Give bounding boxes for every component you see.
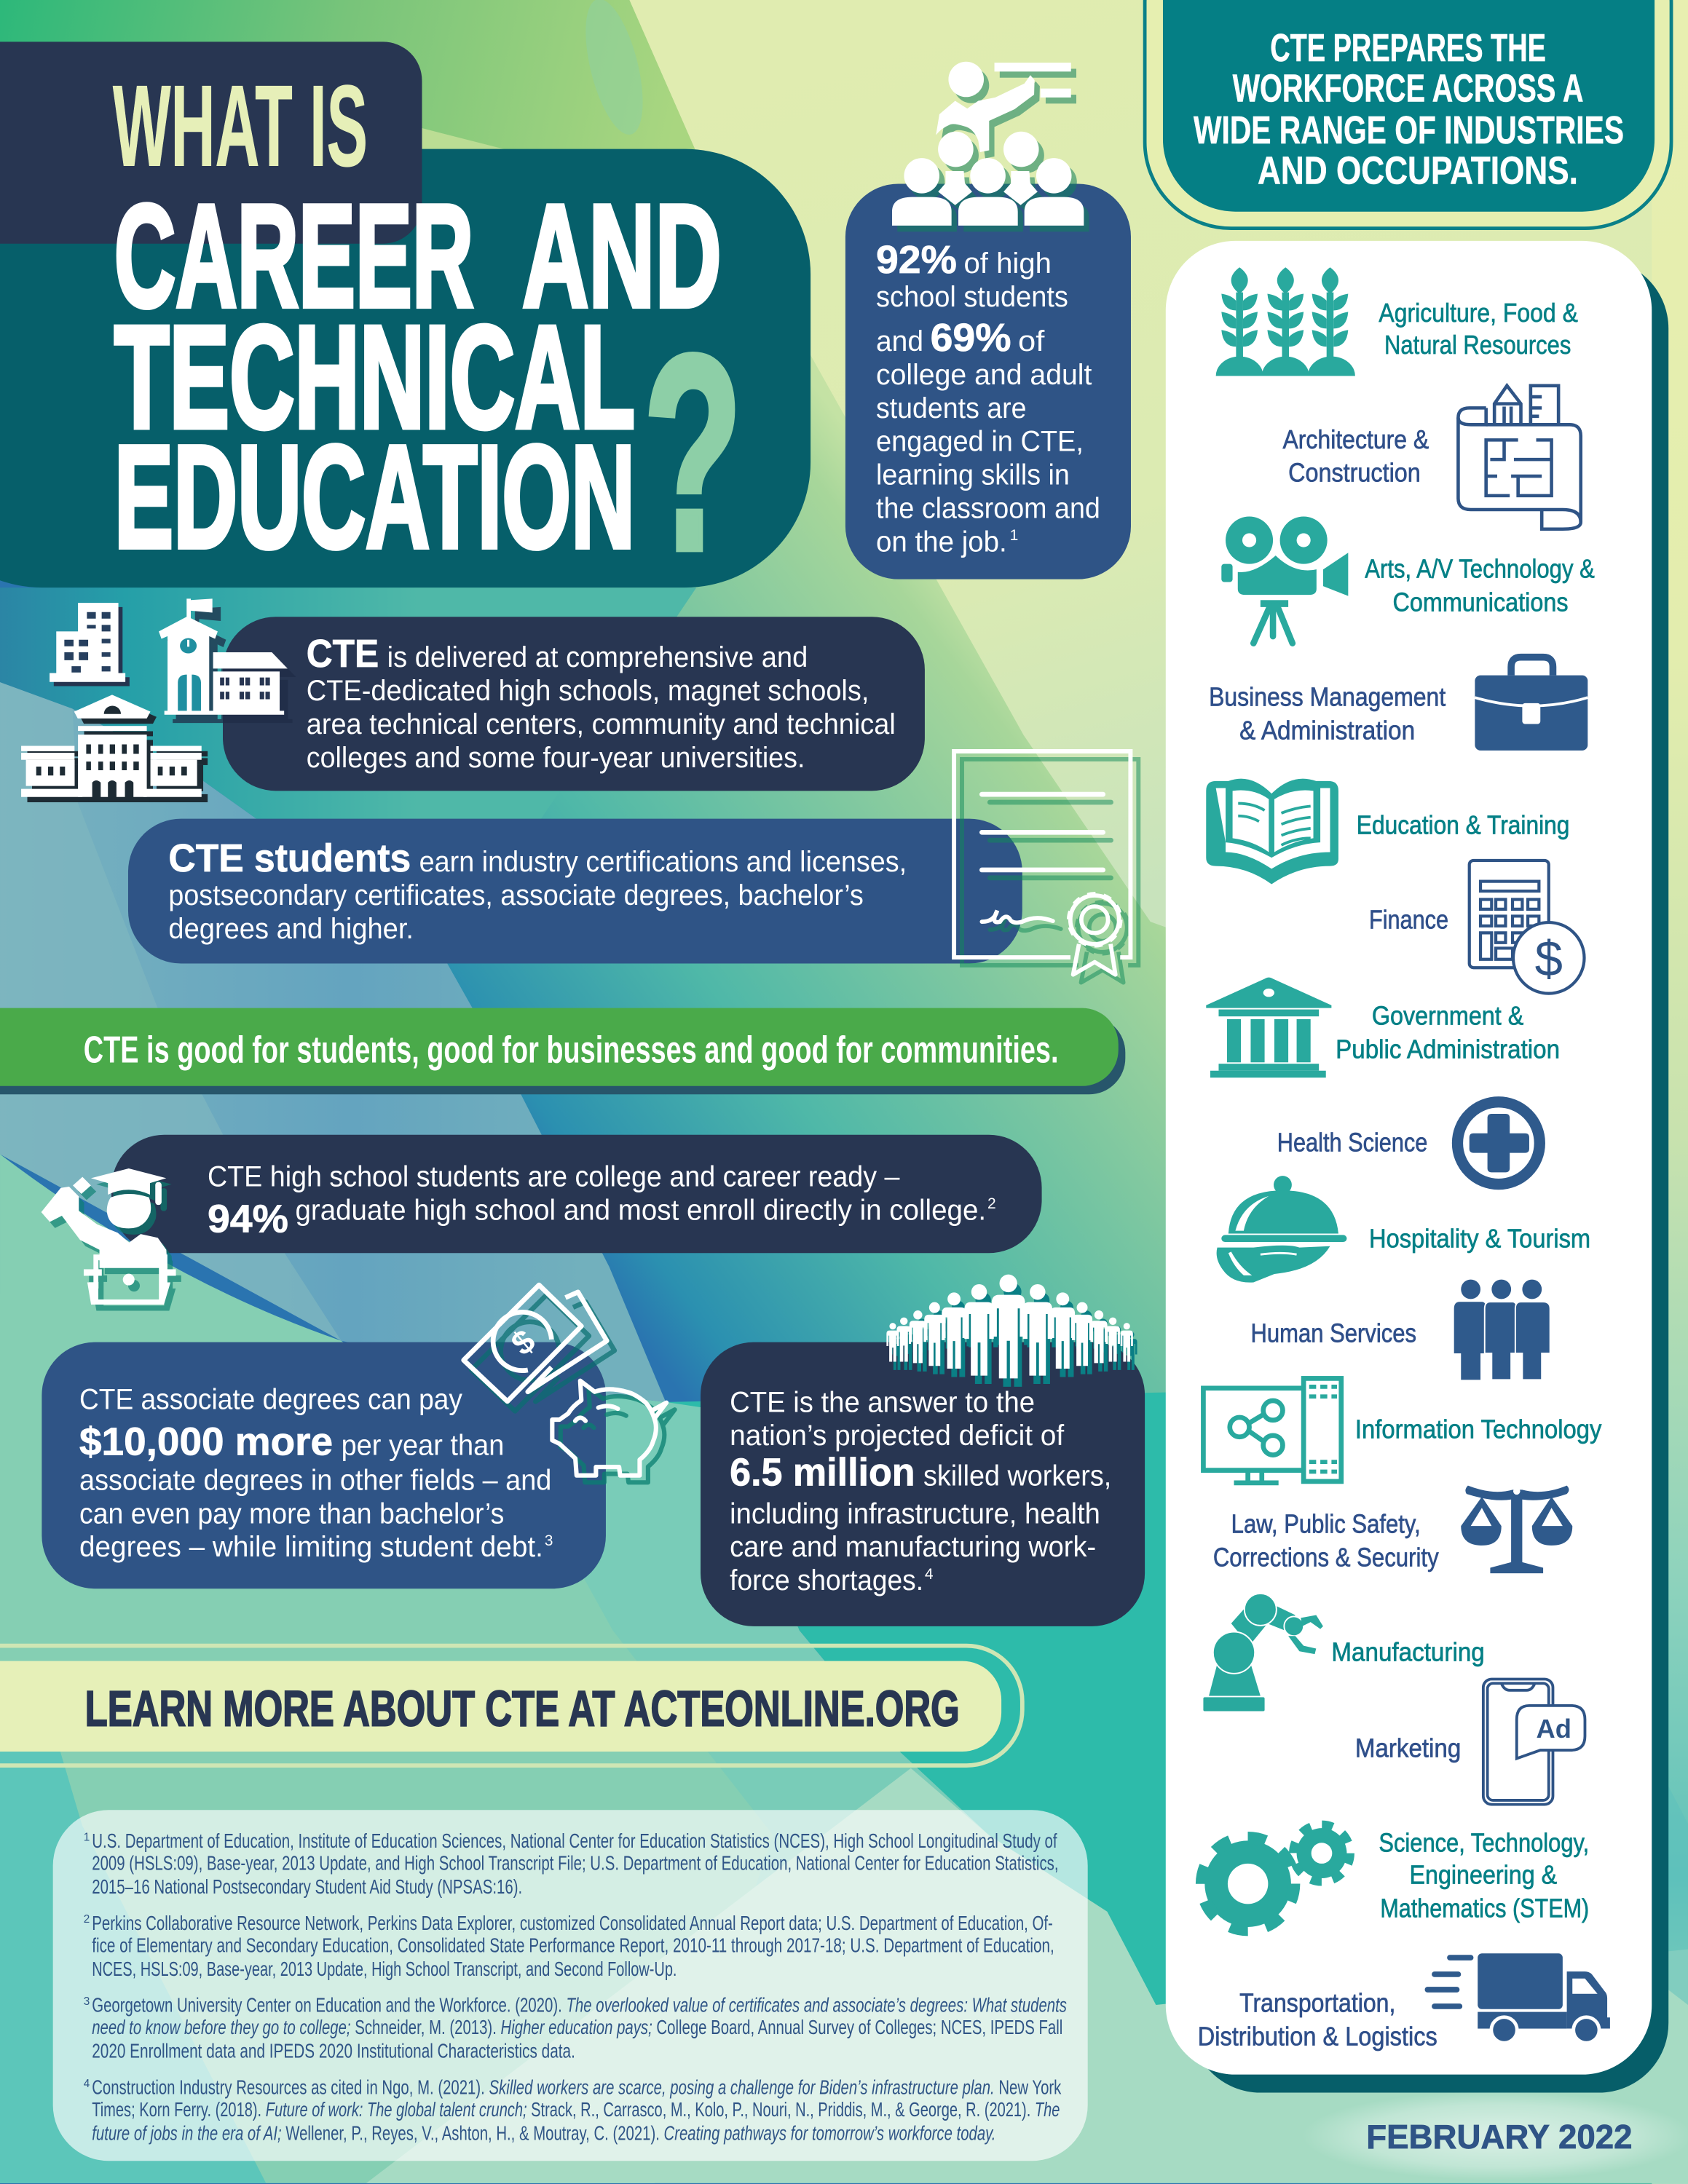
heading: technical: TECHNICAL xyxy=(114,295,635,459)
footnote 3: 3 xyxy=(84,1995,90,2008)
icon: film camera xyxy=(1221,517,1348,644)
label: marketing: Marketing xyxy=(1355,1733,1461,1763)
icon: medical cross xyxy=(1457,1102,1539,1184)
label: government: Public Administration xyxy=(1336,1034,1560,1064)
paragraph: is delivered at comprehensive and xyxy=(387,641,808,673)
paragraph xyxy=(168,837,907,945)
icon: calculator and coin xyxy=(1470,860,1585,994)
footnote 3 xyxy=(84,1994,1067,2062)
statistic text: college and adult xyxy=(876,358,1092,391)
paragraph: including infrastructure, health xyxy=(730,1497,1100,1530)
icon: serving cloche xyxy=(1217,1176,1346,1283)
paragraph xyxy=(79,1382,553,1563)
statistic text xyxy=(876,239,1100,558)
header text: AND OCCUPATIONS. xyxy=(1258,149,1578,192)
statistic text: students are xyxy=(876,392,1027,424)
icon: graduate with laptop xyxy=(42,1168,181,1310)
statistic text: and xyxy=(876,325,923,357)
label: education: Education & Training xyxy=(1357,810,1569,840)
paragraph: colleges and some four-year universities. xyxy=(307,741,805,774)
paragraph: associate degrees in other fields – and xyxy=(79,1463,551,1496)
paragraph: skilled workers, xyxy=(923,1460,1111,1492)
statistic text: engaged in CTE, xyxy=(876,425,1084,458)
call to action text: LEARN MORE ABOUT CTE AT ACTEONLINE.ORG xyxy=(85,1681,960,1737)
label: health science: Health Science xyxy=(1277,1128,1427,1158)
paragraph: CTE xyxy=(307,633,379,676)
header outline xyxy=(1145,0,1671,229)
paragraph: CTE-dedicated high schools, magnet schools, xyxy=(307,674,869,707)
footnote 4: Construction Industry Resources as cited in Ngo, M. (2021). Skilled workers are scarce, posing a challenge for Biden’s infrastructure plan. New York xyxy=(92,2076,1061,2098)
label: business: & Administration xyxy=(1239,716,1415,745)
footnote 3: Georgetown University Center on Education and the Workforce. (2020). The overlooked value of certificates and associate’s degrees: What students xyxy=(92,1994,1067,2017)
icon: open book xyxy=(1206,779,1338,884)
footnote 4: future of jobs in the era of AI; Wellener, P., Reyes, V., Ashton, H., & Moutray, C. (2021). Creating pathways for tomorrow’s workforce today. xyxy=(92,2122,995,2145)
icon: three people xyxy=(1454,1280,1550,1380)
statistic text: on the job. xyxy=(876,525,1007,558)
label: agriculture: Natural Resources xyxy=(1384,330,1571,360)
footnote 2: Perkins Collaborative Resource Network, Perkins Data Explorer, customized Consolidated Annual Report data; U.S. Department of Education, Of- xyxy=(92,1912,1053,1934)
heading: career and: CAREER xyxy=(114,174,473,338)
label: stem: Science, Technology, xyxy=(1379,1828,1589,1858)
footnote 2: NCES, HSLS:09, Base-year, 2013 Update, High School Transcript, and Second Follow-Up. xyxy=(92,1958,677,1980)
paragraph xyxy=(307,633,896,774)
icon: delivery truck xyxy=(1425,1953,1610,2045)
paragraph: 94% xyxy=(208,1198,288,1241)
footnote 4 xyxy=(84,2076,1061,2145)
panel background xyxy=(223,617,925,791)
icon: money and piggy bank xyxy=(464,1285,675,1482)
panel: associate degree pay xyxy=(42,1342,606,1588)
label: law xyxy=(1213,1509,1439,1572)
footnote 2 xyxy=(84,1912,1054,1980)
footnote 3: 2020 Enrollment data and IPEDS 2020 Institutional Characteristics data. xyxy=(92,2040,575,2062)
label: agriculture: Agriculture, Food & xyxy=(1379,298,1578,328)
label: law: Corrections & Security xyxy=(1213,1543,1439,1572)
label: law: Law, Public Safety, xyxy=(1231,1509,1421,1539)
icon: certificate xyxy=(954,751,1138,983)
paragraph: CTE is the answer to the xyxy=(730,1385,1035,1418)
icon: computer and server xyxy=(1203,1378,1341,1483)
footnote 1: U.S. Department of Education, Institute of Education Sciences, National Center for Education Statistics (NCES), High School Longitudinal Study of xyxy=(92,1829,1057,1852)
panel: title xyxy=(0,41,811,608)
panel: college and career ready xyxy=(111,1135,1042,1253)
icon: briefcase xyxy=(1475,657,1588,751)
icon: government building xyxy=(1206,978,1331,1077)
panel background xyxy=(111,1135,1042,1253)
panel: where CTE is delivered xyxy=(223,617,925,791)
header text: CTE PREPARES THE xyxy=(1270,27,1546,70)
footnote 4: 4 xyxy=(84,2078,90,2090)
icon: school buildings xyxy=(21,598,296,802)
paragraph: force shortages. xyxy=(730,1564,923,1597)
label: business xyxy=(1209,682,1446,745)
label: hospitality: Hospitality & Tourism xyxy=(1369,1224,1590,1254)
banner: learn more xyxy=(0,1646,1022,1765)
label: architecture: Construction xyxy=(1288,458,1421,488)
label: transportation xyxy=(1198,1988,1437,2052)
footnote background xyxy=(53,1810,1088,2161)
banner text: CTE is good for students, good for businesses and good for communities. xyxy=(84,1028,1059,1070)
paragraph: degrees and higher. xyxy=(168,912,414,945)
label: architecture: Architecture & xyxy=(1282,424,1429,454)
statistic text: 69% xyxy=(931,317,1011,360)
title tab xyxy=(0,41,422,244)
label: stem: Engineering & xyxy=(1409,1860,1557,1890)
panel background xyxy=(701,1342,1145,1626)
paragraph: 6.5 million xyxy=(730,1452,915,1495)
paragraph: postsecondary certificates, associate degrees, bachelor’s xyxy=(168,879,864,911)
statistic text: of xyxy=(1018,325,1045,357)
question mark: ? xyxy=(644,298,742,608)
statistic text: school students xyxy=(876,280,1068,313)
label: agriculture xyxy=(1379,298,1578,360)
label: arts: Communications xyxy=(1393,587,1569,617)
paragraph: earn industry certifications and licenses, xyxy=(419,845,907,878)
label: stem: Mathematics (STEM) xyxy=(1380,1894,1589,1923)
icon: phone with ad: Ad xyxy=(1537,1714,1571,1744)
statistic text: of high xyxy=(963,247,1052,280)
label: information technology: Information Technology xyxy=(1355,1415,1602,1444)
label: transportation: Distribution & Logistics xyxy=(1198,2022,1437,2052)
panel body xyxy=(1166,241,1652,2075)
paragraph xyxy=(730,1385,1111,1597)
paragraph: $10,000 more xyxy=(79,1421,333,1464)
panel: career clusters xyxy=(1166,241,1668,2093)
header text xyxy=(1194,27,1624,192)
footnote 1: 1 xyxy=(84,1831,90,1843)
heading: what is: WHAT IS xyxy=(113,61,368,191)
icon: crowd of workers xyxy=(886,1275,1137,1387)
label: arts xyxy=(1365,554,1595,617)
statistic text: 92% xyxy=(876,239,957,282)
panel: CTE students xyxy=(128,819,1022,963)
statistic text: 1 xyxy=(1010,527,1018,544)
label: finance: Finance xyxy=(1369,905,1448,935)
footnote 2: fice of Elementary and Secondary Education, Consolidated State Performance Report, 2010-11 through 2017-18; U.S. Department of Education, xyxy=(92,1934,1054,1956)
paragraph: can even pay more than bachelor’s xyxy=(79,1497,504,1530)
footnote 1: 2015–16 National Postsecondary Student Aid Study (NPSAS:16). xyxy=(92,1875,522,1898)
paragraph: area technical centers, community and technical xyxy=(307,708,896,740)
panel: footnotes xyxy=(53,1810,1088,2161)
icon: phone with ad xyxy=(1483,1679,1585,1805)
paragraph: CTE high school students are college and career ready – xyxy=(208,1160,900,1192)
date xyxy=(1302,2092,1688,2180)
label: business: Business Management xyxy=(1209,682,1446,712)
icon: calculator and coin: $ xyxy=(1535,931,1563,987)
heading: education: EDUCATION xyxy=(114,415,635,579)
label: human services: Human Services xyxy=(1250,1318,1416,1348)
heading: career and: AND xyxy=(522,174,722,338)
label: manufacturing: Manufacturing xyxy=(1331,1637,1485,1667)
paragraph xyxy=(208,1160,996,1241)
header fill xyxy=(1163,0,1655,212)
paragraph: 4 xyxy=(925,1566,934,1583)
icon: balance scales xyxy=(1461,1486,1572,1573)
icon: gears xyxy=(1202,1824,1350,1930)
label: architecture xyxy=(1282,424,1429,488)
paragraph: per year than xyxy=(342,1429,504,1462)
label: arts: Arts, A/V Technology & xyxy=(1365,554,1595,584)
footnote 4: Times; Korn Ferry. (2018). Future of work: The global talent crunch; Strack, R., Carrasco, M., Kolo, P., Nouri, N., Priddis, M., & George, R. (2021). The xyxy=(92,2098,1060,2121)
footnote 2: 2 xyxy=(84,1913,90,1926)
panel: skilled worker deficit xyxy=(701,1342,1145,1626)
paragraph: CTE students xyxy=(168,837,411,880)
footnote 1: 2009 (HSLS:09), Base-year, 2013 Update, and High School Transcript File; U.S. Department of Education, National Center for Education Statistics, xyxy=(92,1852,1059,1875)
label: government: Government & xyxy=(1372,1001,1523,1031)
panel background xyxy=(128,819,1022,963)
paragraph: care and manufacturing work- xyxy=(730,1530,1096,1563)
panel background xyxy=(845,183,1131,579)
paragraph: nation’s projected deficit of xyxy=(730,1419,1065,1452)
label: stem xyxy=(1379,1828,1589,1923)
footnote 3: need to know before they go to college; Schneider, M. (2013). Higher education pays; College Board, Annual Survey of Colleges; NCES, IPEDS Fall xyxy=(92,2016,1062,2038)
label: transportation: Transportation, xyxy=(1239,1988,1395,2018)
paragraph: 3 xyxy=(545,1532,553,1549)
date: FEBRUARY 2022 xyxy=(1366,2118,1632,2156)
banner: good for students xyxy=(0,1008,1125,1094)
title background panel xyxy=(0,149,811,587)
panel: 92 percent xyxy=(845,183,1131,579)
panel background xyxy=(42,1342,606,1588)
paragraph: 2 xyxy=(987,1195,996,1212)
statistic text: the classroom and xyxy=(876,491,1100,524)
icon: architecture plans xyxy=(1458,386,1581,529)
panel: CTE prepares the workforce xyxy=(1145,0,1671,229)
paragraph: CTE associate degrees can pay xyxy=(79,1382,462,1415)
statistic text: learning skills in xyxy=(876,459,1070,491)
panel shadow xyxy=(1191,259,1668,2093)
icon: teacher and students xyxy=(892,62,1089,232)
paragraph: graduate high school and most enroll directly in college. xyxy=(295,1193,986,1226)
icon: money and piggy bank: $ xyxy=(504,1321,543,1363)
icon: robot arm xyxy=(1203,1594,1323,1712)
label: government xyxy=(1336,1001,1560,1064)
icon: agriculture xyxy=(1216,267,1355,376)
paragraph: degrees – while limiting student debt. xyxy=(79,1530,543,1563)
footnote 1 xyxy=(84,1829,1059,1898)
